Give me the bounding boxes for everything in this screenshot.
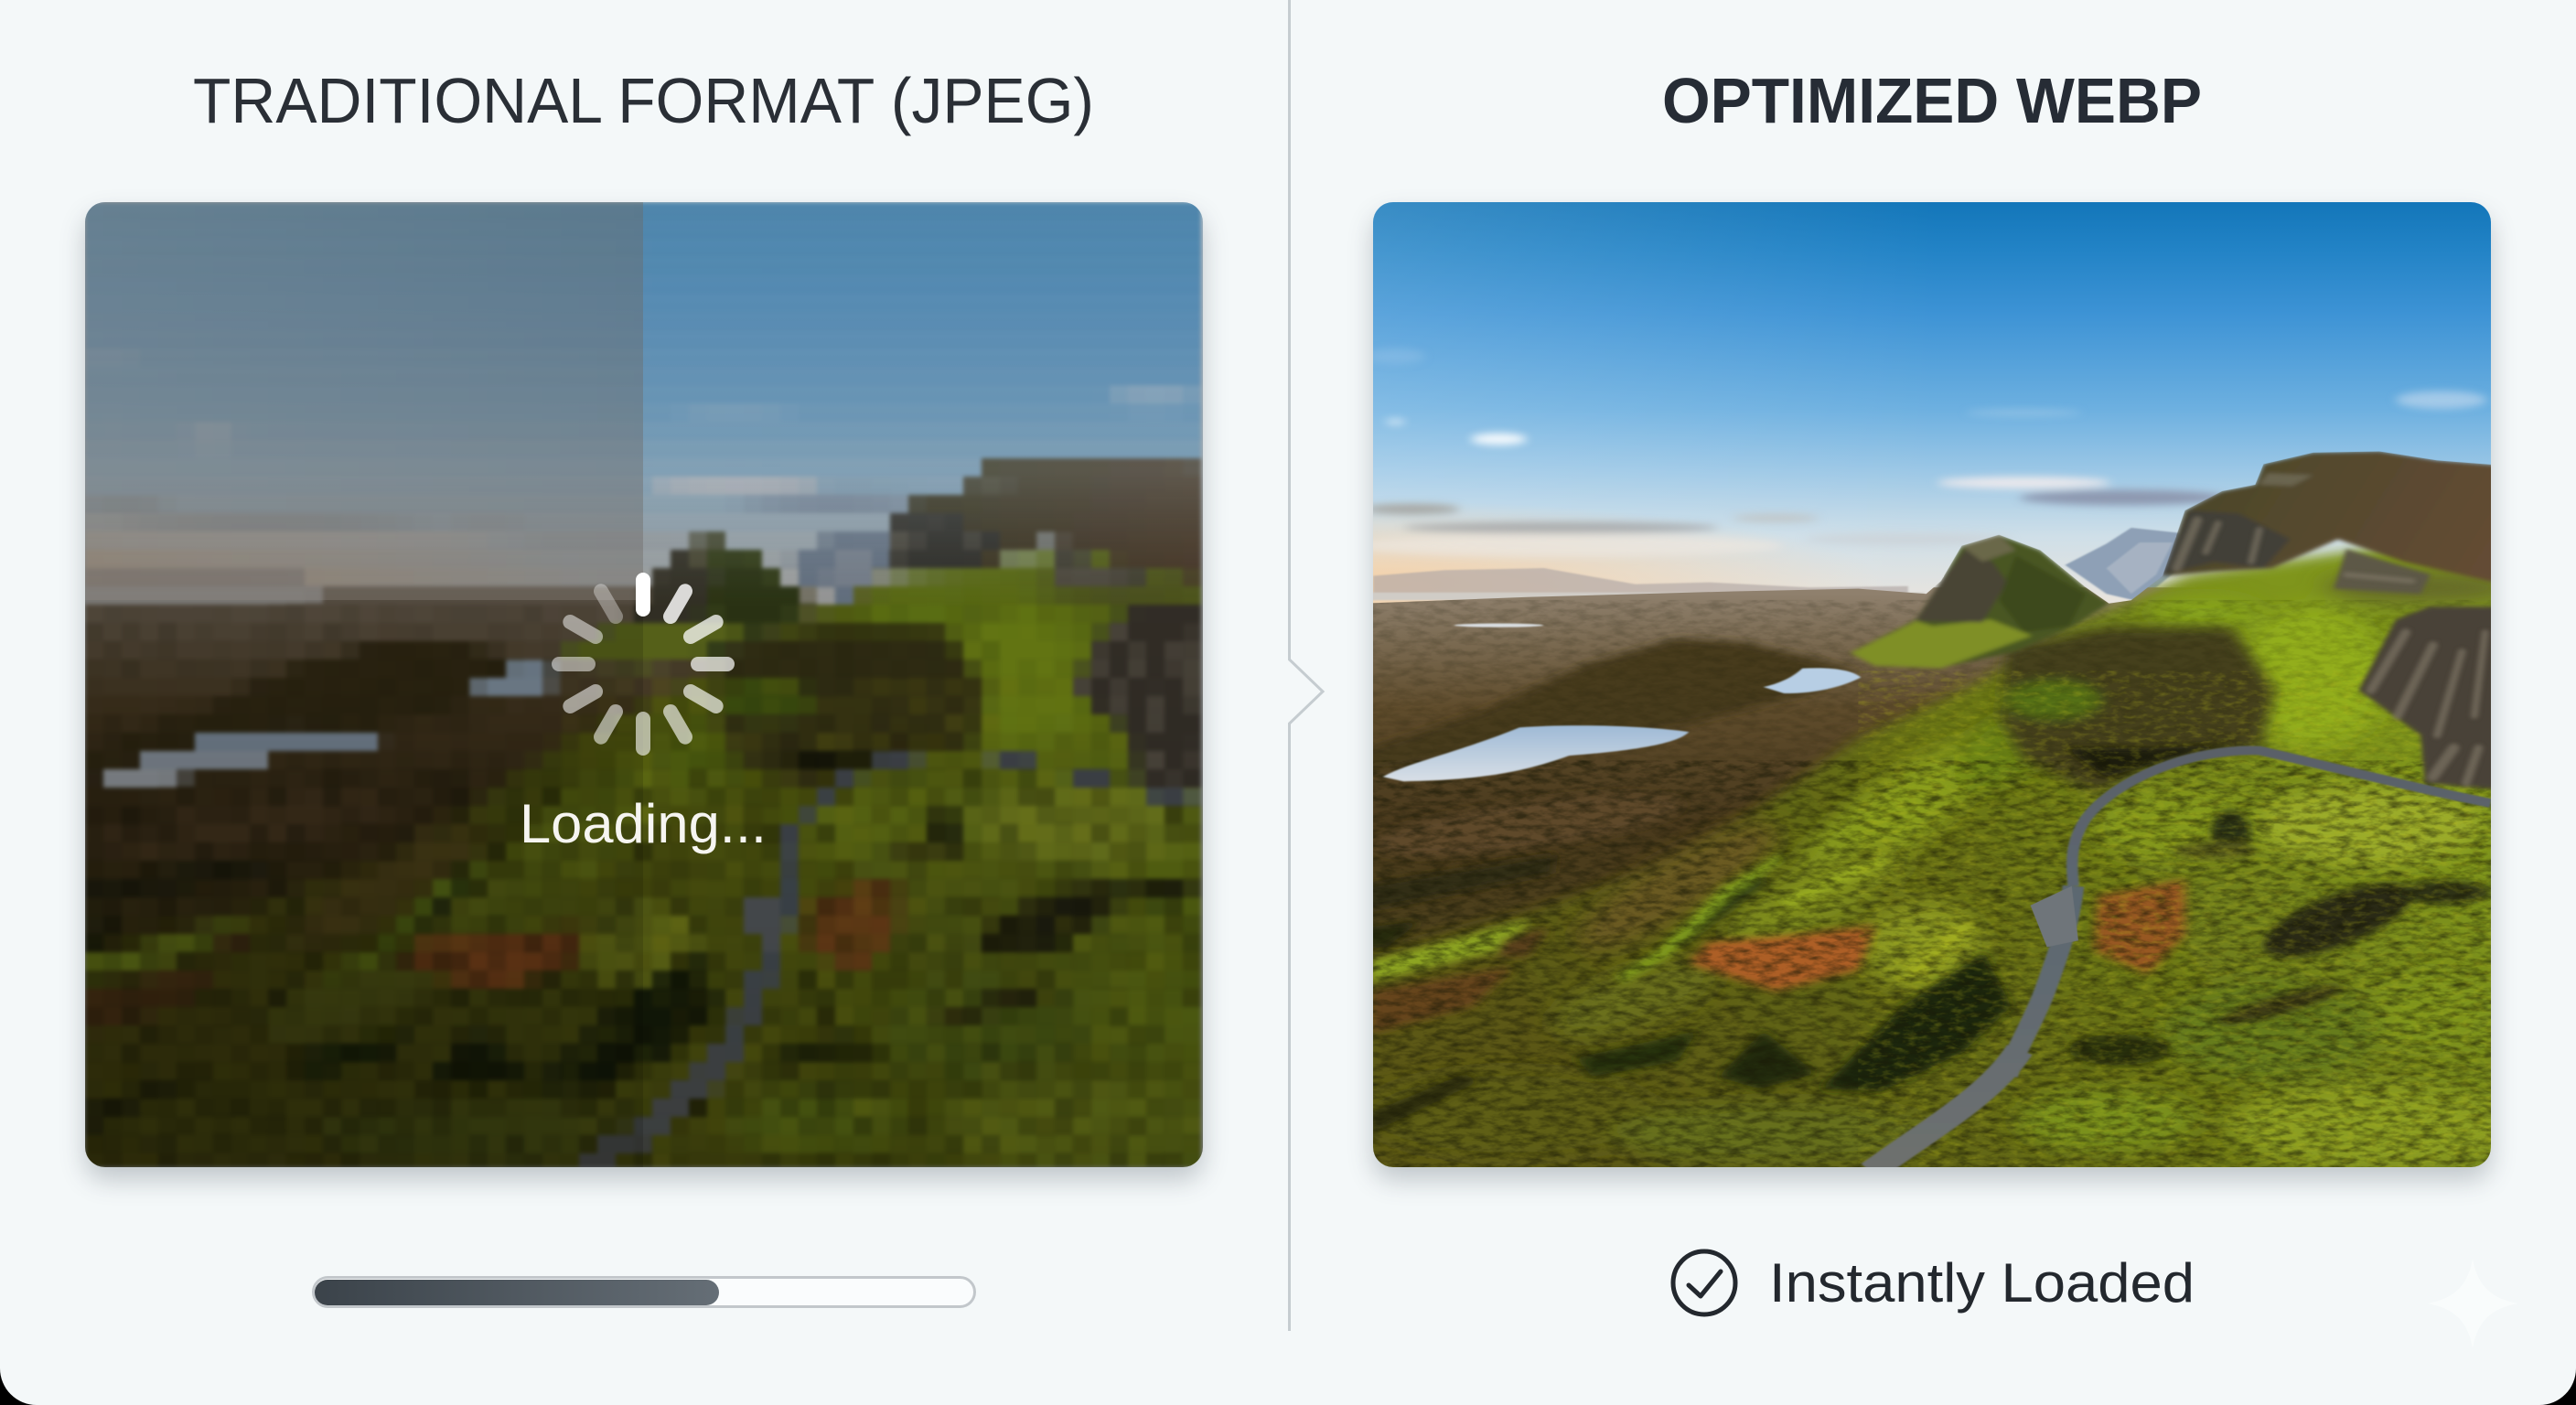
icon: loading spinner bbox=[552, 573, 735, 756]
panel: traditional JPEG loading image bbox=[66, 196, 1232, 1180]
heading: traditional format: TRADITIONAL FORMAT (JPEG) bbox=[193, 65, 1094, 136]
progress bar bbox=[313, 1277, 975, 1306]
heading: optimized webp: OPTIMIZED WEBP bbox=[1662, 65, 2202, 136]
panel: optimized WebP image bbox=[1354, 196, 2520, 1180]
status label: instantly loaded: Instantly Loaded bbox=[1769, 1252, 2195, 1314]
divider with arrow notch bbox=[1290, 0, 1323, 1331]
loading label: Loading... bbox=[520, 793, 767, 854]
icon: sparkle watermark bbox=[2427, 1259, 2518, 1348]
icon: check circle bbox=[1673, 1251, 1735, 1314]
